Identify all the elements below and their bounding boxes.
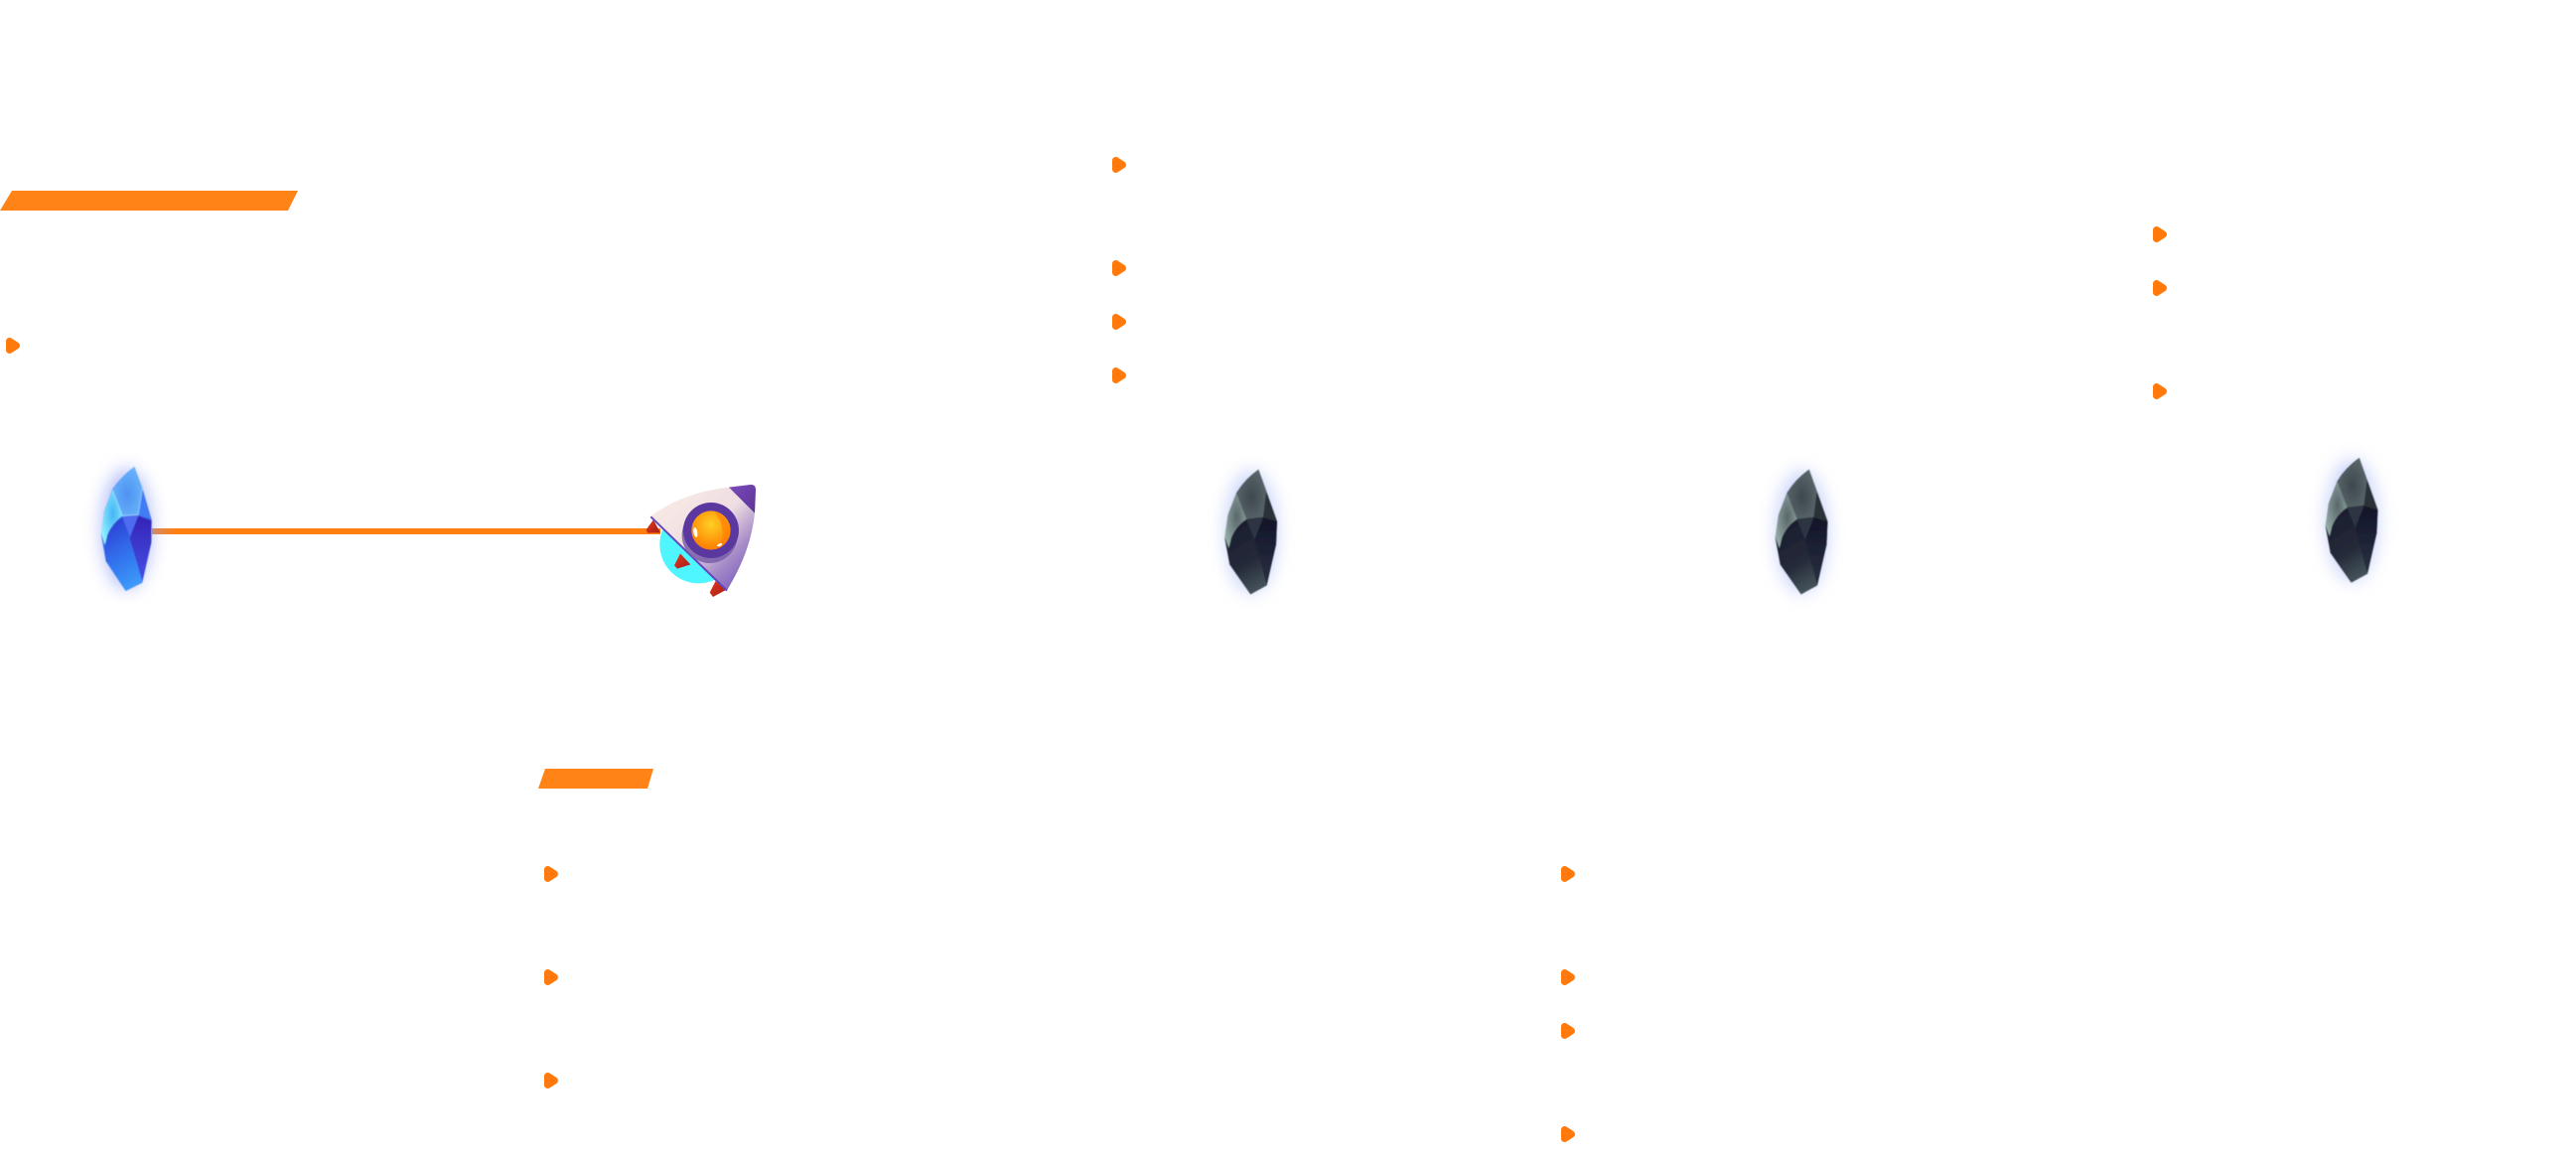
orange heading bar: top left: [0, 191, 298, 211]
bullet list: second column top: [1116, 161, 1122, 379]
bullet list: far left: [10, 342, 16, 350]
icon: active blue crystal: [101, 467, 152, 591]
timeline connector line: [152, 528, 660, 534]
icon: rocket: [646, 485, 756, 597]
rocket base edge: [650, 516, 727, 591]
rocket body: [650, 485, 756, 591]
rocket nose: [729, 485, 756, 513]
bullet list: far right top: [2157, 230, 2163, 395]
bullet list: bottom left: [548, 870, 554, 1085]
porthole: [682, 503, 739, 563]
icon: locked dark crystal 1: [1224, 470, 1277, 594]
icon: locked dark crystal 3: [2326, 458, 2377, 583]
bullet list: bottom right: [1565, 870, 1571, 1138]
flames: [646, 519, 726, 597]
icon: locked dark crystal 2: [1776, 470, 1827, 594]
cyan circle backdrop: [659, 506, 737, 583]
orange heading bar: bottom: [538, 769, 653, 789]
